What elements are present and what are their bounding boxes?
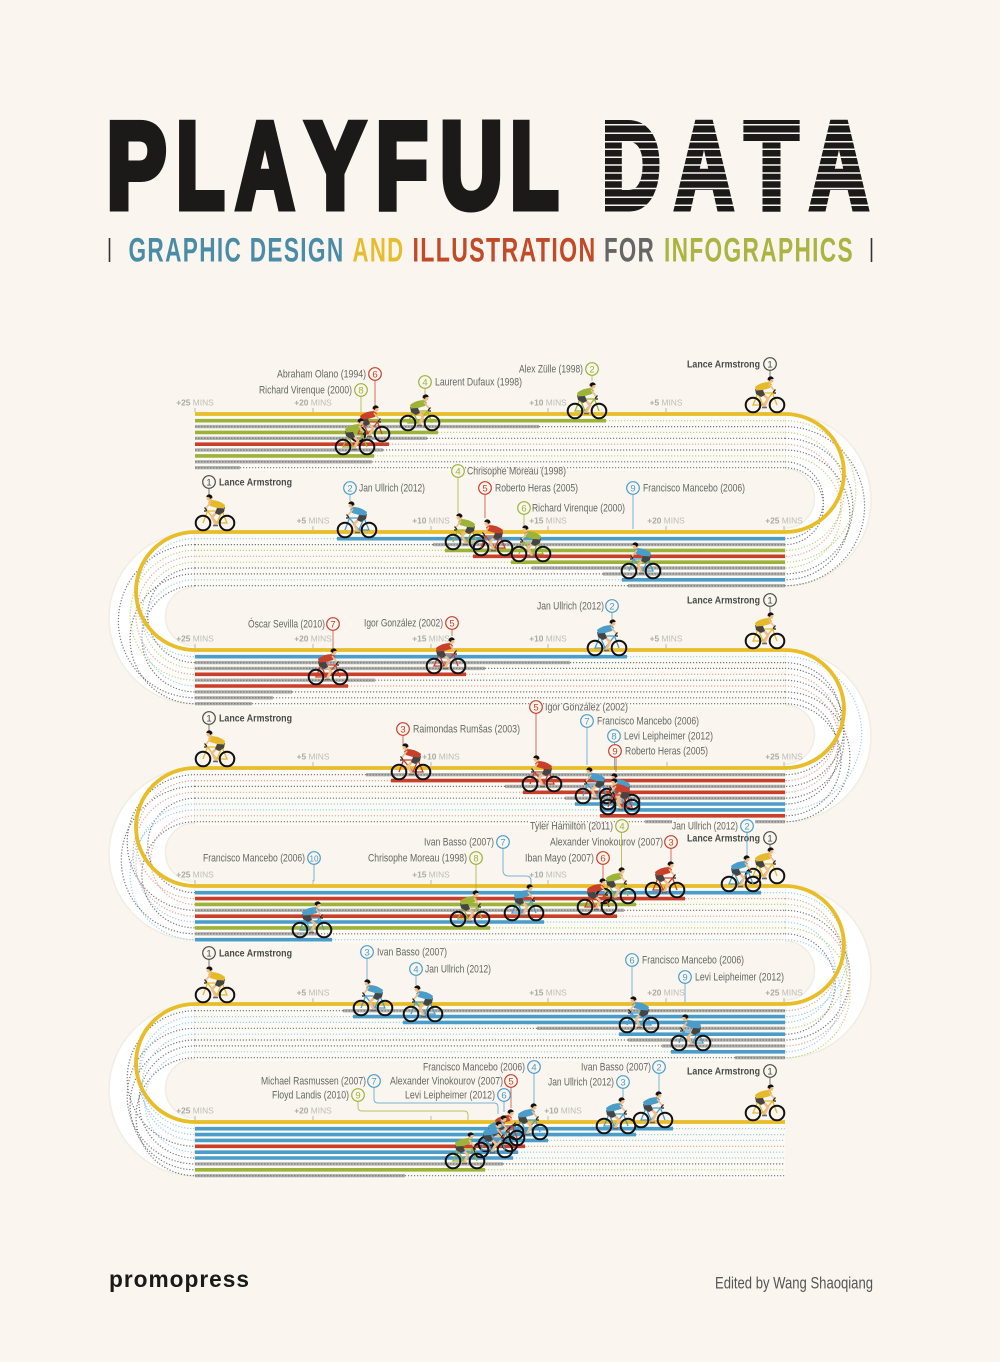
stage 2 riders	[196, 465, 745, 578]
rider: Jan Ullrich	[338, 482, 425, 537]
time axis labels: stage 1: +25 MINS	[176, 398, 214, 408]
rider: Michael Rasmussen	[261, 1075, 517, 1151]
time axis labels: stage 7: +10 MINS	[544, 1106, 582, 1116]
icon: cyclist Sevilla	[309, 648, 347, 684]
icon: cyclist Vinokourov	[486, 1109, 524, 1145]
rider: Richard Virenque	[259, 384, 374, 454]
rider: Ivan Basso: 2	[656, 1062, 662, 1073]
time axis labels: stage 6: +5 MINS	[297, 988, 330, 998]
rider: Raimondas Rumšas: 3	[400, 724, 406, 735]
rider: Lance Armstrong: Lance Armstrong	[219, 478, 292, 489]
rider: Abraham Olano	[277, 368, 389, 441]
time axis labels: stage 1: +5 MINS	[650, 398, 683, 408]
rider: Levi Leipheimer: 6	[501, 1090, 507, 1101]
icon: cyclist Leipheimer	[474, 1121, 512, 1157]
rider: Jan Ullrich: Jan Ullrich (2012)	[425, 964, 491, 976]
icon: cyclist Basso	[634, 1091, 672, 1127]
rider: Lance Armstrong: 1	[767, 595, 773, 606]
rider: Lance Armstrong: Lance Armstrong	[219, 714, 292, 725]
time axis labels: stage 4: +25 MINS	[765, 752, 803, 762]
time axis labels: stage 5: +25 MINS	[176, 870, 214, 880]
icon: cyclist Rumšas	[392, 743, 430, 779]
rider: Jan Ullrich: Jan Ullrich (2012)	[359, 483, 425, 495]
rider: Igor González	[523, 701, 628, 791]
rider: Chrisophe Moreau: Chrisophe Moreau (1998)	[368, 853, 467, 865]
rider: Alexander Vinokourov	[550, 836, 684, 897]
rider: Lance Armstrong: 1	[767, 359, 773, 370]
time axis labels: stage 7: +20 MINS	[294, 1106, 332, 1116]
subtitle: FOR	[604, 232, 655, 270]
rider: Levi Leipheimer	[672, 971, 784, 1050]
subtitle: AND	[352, 232, 404, 270]
icon: cyclist Mancebo	[620, 996, 658, 1032]
icon: cyclist Rasmussen	[479, 1115, 517, 1151]
rider: Abraham Olano: Abraham Olano (1994)	[277, 369, 366, 381]
time axis labels: stage 4	[297, 752, 803, 766]
time axis labels: stage 5: +15 MINS	[412, 870, 450, 880]
rider: Roberto Heras: 5	[482, 483, 488, 494]
rider: Iban Mayo: Iban Mayo (2007)	[525, 853, 594, 865]
stage 5 riders	[203, 820, 784, 937]
icon: cyclist Heras	[601, 778, 639, 814]
rider: Levi Leipheimer: Levi Leipheimer (2012)	[695, 972, 784, 984]
rider: Jan Ullrich	[404, 963, 491, 1021]
time axis labels: stage 4: +5 MINS	[297, 752, 330, 762]
rider: Ivan Basso	[424, 836, 543, 920]
rider: Ivan Basso: 7	[500, 837, 506, 848]
time gap bars: stage 2	[118, 539, 785, 704]
rider: Abraham Olano: 6	[372, 369, 378, 380]
rider: Ivan Basso	[354, 946, 447, 1015]
rider: Francisco Mancebo	[576, 715, 699, 803]
rider: Ivan Basso: Ivan Basso (2007)	[424, 837, 494, 849]
rider: Levi Leipheimer: Levi Leipheimer (2012)	[624, 731, 713, 743]
rider: Richard Virenque: Richard Virenque (2000)	[259, 385, 352, 397]
icon: cyclist González	[523, 755, 561, 791]
icon: cyclist Ullrich	[588, 619, 626, 655]
time axis labels: stage 1: +10 MINS	[529, 398, 567, 408]
title: DATA striped: A	[675, 98, 733, 234]
time axis labels: stage 5	[176, 870, 567, 884]
icon: cyclist Ullrich	[404, 985, 442, 1021]
rider: Jan Ullrich: 2	[347, 483, 353, 494]
time axis labels: stage 6: +20 MINS	[647, 988, 685, 998]
rider: Jan Ullrich: Jan Ullrich (2012)	[548, 1077, 614, 1089]
icon: cyclist Dufaux	[401, 394, 439, 430]
stage 3 riders	[248, 594, 784, 684]
rider: Lance Armstrong: Lance Armstrong	[687, 834, 760, 845]
rider: Igor González	[364, 617, 465, 673]
rider: Francisco Mancebo: Francisco Mancebo (2006)	[642, 955, 744, 967]
track background: white curved bands	[109, 414, 871, 1179]
time axis labels: stage 6	[297, 988, 803, 1002]
rider: Richard Virenque: 6	[521, 503, 527, 514]
rider: Francisco Mancebo	[620, 954, 744, 1032]
icon: cyclist Armstrong	[746, 847, 784, 883]
stage 4 riders	[196, 701, 713, 814]
icon: cyclist Hamilton	[597, 867, 635, 903]
rider: Igor González: 5	[449, 618, 455, 629]
rider: Lance Armstrong: Lance Armstrong	[219, 949, 292, 960]
rider: Ivan Basso: Ivan Basso (2007)	[581, 1062, 651, 1074]
icon: cyclist Armstrong	[196, 730, 234, 766]
rider: Francisco Mancebo: Francisco Mancebo (2006)	[597, 716, 699, 728]
icon: cyclist Zülle	[568, 382, 606, 418]
rider: Tyler Hamilton	[530, 820, 635, 903]
rider: Francisco Mancebo: Francisco Mancebo (2006)	[643, 483, 745, 495]
icon: cyclist Armstrong	[196, 966, 234, 1002]
rider: Roberto Heras: Roberto Heras (2005)	[495, 483, 578, 495]
rider: Richard Virenque: Richard Virenque (2000)	[532, 503, 625, 515]
publisher: promopress: promopress	[109, 1266, 250, 1292]
rider: Michael Rasmussen: Michael Rasmussen (2007)	[261, 1076, 366, 1088]
yellow race track line	[136, 414, 844, 1122]
icon: cyclist Mancebo	[509, 1103, 547, 1139]
icon: cyclist Basso	[354, 979, 392, 1015]
rider: Levi Leipheimer: Levi Leipheimer (2012)	[405, 1090, 495, 1102]
title: PLAYFUL: F	[376, 98, 428, 234]
rider: Alexander Vinokourov: Alexander Vinokourov (2007)	[550, 837, 663, 849]
title: PLAYFUL: Y	[306, 98, 364, 234]
time axis labels: stage 6: +15 MINS	[529, 988, 567, 998]
icon: cyclist Heras	[474, 519, 512, 555]
rider: Óscar Sevilla: Óscar Sevilla (2010)	[248, 618, 325, 631]
icon: cyclist Basso	[505, 884, 543, 920]
time gap bars: stage 7	[195, 1129, 785, 1176]
rider: Lance Armstrong: 1	[206, 477, 212, 488]
rider: Jan Ullrich	[672, 820, 760, 891]
time axis labels: stage 2: +20 MINS	[647, 516, 685, 526]
time axis labels: stage 2: +15 MINS	[529, 516, 567, 526]
icon: cyclist González	[427, 637, 465, 673]
icon: cyclist Armstrong	[746, 376, 784, 412]
time axis labels: stage 1	[176, 398, 683, 412]
rider: Jan Ullrich: Jan Ullrich (2012)	[672, 821, 738, 833]
rider: Lance Armstrong	[687, 1065, 784, 1120]
stage 7 riders	[261, 1061, 784, 1168]
rider: Jan Ullrich	[537, 600, 626, 655]
rider: Jan Ullrich	[548, 1076, 635, 1133]
rider: Floyd Landis	[272, 1089, 484, 1168]
rider: Francisco Mancebo: 10	[310, 854, 319, 863]
title: PLAYFUL: L	[176, 98, 224, 234]
title: PLAYFUL: L	[510, 98, 558, 234]
rider: Alex Zülle: 2	[589, 364, 595, 375]
icon: cyclist Ullrich	[722, 855, 760, 891]
rider: Lance Armstrong: 1	[767, 833, 773, 844]
icon: cyclist Leipheimer	[601, 773, 639, 809]
time gap bars: stage 3	[195, 657, 862, 822]
rider: Raimondas Rumšas	[392, 723, 520, 779]
rider: Tyler Hamilton: 4	[619, 821, 625, 832]
rider: Ivan Basso: Ivan Basso (2007)	[377, 947, 447, 959]
title: PLAYFUL: A	[236, 98, 294, 234]
time axis labels: stage 7: +25 MINS	[176, 1106, 214, 1116]
rider: Roberto Heras	[601, 745, 708, 814]
rider: Richard Virenque: 8	[358, 385, 364, 396]
time axis labels: stage 3: +25 MINS	[176, 634, 214, 644]
icon: cyclist Mayo	[578, 878, 616, 914]
rider: Francisco Mancebo	[423, 1061, 547, 1139]
icon: cyclist Moreau	[446, 513, 484, 549]
icon: cyclist Landis	[446, 1132, 484, 1168]
icon: cyclist Mancebo	[622, 542, 660, 578]
rider: Francisco Mancebo: 4	[531, 1062, 537, 1073]
time gap bars: stage 4	[121, 775, 785, 940]
rider: Levi Leipheimer: 9	[682, 972, 688, 983]
rider: Lance Armstrong: 1	[767, 1066, 773, 1077]
rider: Chrisophe Moreau: 4	[455, 466, 461, 477]
rider: Alex Zülle: Alex Zülle (1998)	[519, 364, 583, 376]
time axis labels: stage 7	[176, 1106, 582, 1120]
title: DATA striped: D	[602, 98, 660, 234]
rider: Roberto Heras: Roberto Heras (2005)	[625, 746, 708, 758]
rider: Igor González: 5	[533, 702, 539, 713]
time axis labels: stage 3	[176, 634, 683, 648]
rider: Francisco Mancebo: 9	[630, 483, 636, 494]
rider: Francisco Mancebo: 6	[629, 955, 635, 966]
time axis labels: stage 3: +15 MINS	[412, 634, 450, 644]
rider: Óscar Sevilla	[248, 618, 347, 684]
icon: cyclist Moreau	[451, 890, 489, 926]
title: PLAYFUL: P	[107, 98, 166, 234]
time axis labels: stage 1: +20 MINS	[294, 398, 332, 408]
rider: Richard Virenque	[512, 502, 625, 561]
icon: cyclist Virenque	[512, 525, 550, 561]
icon: cyclist Ullrich	[338, 501, 376, 537]
icon: cyclist Mancebo	[293, 901, 331, 937]
time axis labels: stage 2	[297, 516, 803, 530]
time gap bars: stage 1	[195, 421, 865, 586]
rider: Jan Ullrich: Jan Ullrich (2012)	[537, 601, 604, 613]
stage 6 riders	[196, 946, 784, 1050]
rider: Alexander Vinokourov: 3	[668, 837, 674, 848]
rider: Alex Zülle	[519, 363, 606, 418]
rider: Levi Leipheimer: 8	[611, 731, 617, 742]
rider: Alexander Vinokourov: 5	[508, 1076, 514, 1087]
icon: cyclist Virenque	[336, 418, 374, 454]
title: PLAYFUL	[107, 98, 558, 234]
rider: Francisco Mancebo: 7	[584, 716, 590, 727]
time axis labels: stage 3: +10 MINS	[529, 634, 567, 644]
stage 1 riders	[259, 358, 784, 454]
title: DATA striped	[598, 98, 878, 234]
rider: Floyd Landis: 9	[355, 1090, 361, 1101]
rider: Ivan Basso	[581, 1061, 672, 1127]
time axis labels: stage 3: +20 MINS	[294, 634, 332, 644]
time axis labels: stage 6: +25 MINS	[765, 988, 803, 998]
time gap bars: stage 6	[127, 1011, 785, 1176]
rider: Michael Rasmussen: 7	[371, 1076, 377, 1087]
rider: Francisco Mancebo	[622, 482, 745, 578]
rider: Jan Ullrich: 3	[620, 1077, 626, 1088]
title: DATA striped: T	[745, 98, 798, 234]
rider: Lance Armstrong	[196, 476, 292, 530]
rider: Chrisophe Moreau: Chrisophe Moreau (1998)	[467, 466, 566, 478]
time gap bars: stage 5	[195, 893, 850, 1058]
rider: Chrisophe Moreau: 8	[473, 853, 479, 864]
icon: cyclist Leipheimer	[672, 1014, 710, 1050]
rider: Levi Leipheimer	[405, 1089, 512, 1157]
rider: Laurent Dufaux: Laurent Dufaux (1998)	[435, 377, 522, 389]
editor credit: Edited by Wang Shaoqiang	[715, 1274, 873, 1292]
rider: Lance Armstrong: Lance Armstrong	[687, 596, 760, 607]
rider: Roberto Heras	[474, 482, 578, 555]
rider: Igor González: Igor González (2002)	[364, 618, 443, 630]
title: DATA striped: A	[810, 98, 868, 234]
time axis labels: stage 2: +25 MINS	[765, 516, 803, 526]
rider: Iban Mayo: 6	[600, 853, 606, 864]
subtitle: ILLUSTRATION	[412, 232, 596, 270]
rider: Jan Ullrich: 2	[744, 821, 750, 832]
time axis labels: stage 3: +5 MINS	[650, 634, 683, 644]
rider: Floyd Landis: Floyd Landis (2010)	[272, 1090, 349, 1102]
subtitle: INFOGRAPHICS	[664, 232, 854, 270]
rider: Tyler Hamilton: Tyler Hamilton (2011)	[530, 821, 613, 833]
icon: cyclist Mancebo	[576, 767, 614, 803]
rider: Lance Armstrong	[196, 712, 292, 766]
rider: Jan Ullrich: 2	[609, 601, 615, 612]
time axis labels: stage 2: +10 MINS	[412, 516, 450, 526]
subtitle	[110, 232, 872, 270]
rider: Lance Armstrong: Lance Armstrong	[687, 360, 760, 371]
rider: Chrisophe Moreau	[368, 852, 489, 926]
rider: Alexander Vinokourov: Alexander Vinokourov (2007)	[390, 1076, 503, 1088]
rider: Roberto Heras: 9	[612, 746, 618, 757]
rider: Lance Armstrong: 1	[206, 948, 212, 959]
rider: Levi Leipheimer	[601, 730, 713, 809]
rider: Igor González: Igor González (2002)	[545, 702, 628, 714]
rider: Laurent Dufaux: 4	[422, 377, 428, 388]
rider: Lance Armstrong	[687, 358, 784, 412]
rider: Alexander Vinokourov	[390, 1075, 524, 1145]
rider: Laurent Dufaux	[401, 376, 522, 430]
rider: Lance Armstrong: 1	[206, 713, 212, 724]
rider: Raimondas Rumšas: Raimondas Rumšas (2003)	[413, 724, 520, 736]
time axis labels: stage 4: +10 MINS	[422, 752, 460, 762]
time axis labels: stage 5: +10 MINS	[529, 870, 567, 880]
rider: Óscar Sevilla: 7	[330, 619, 336, 630]
rider: Lance Armstrong: Lance Armstrong	[687, 1067, 760, 1078]
title: PLAYFUL: U	[440, 98, 503, 234]
rider: Francisco Mancebo	[203, 852, 331, 937]
rider: Francisco Mancebo: Francisco Mancebo (2006)	[203, 853, 305, 865]
icon: cyclist Armstrong	[746, 1084, 784, 1120]
rider: Francisco Mancebo: Francisco Mancebo (2006)	[423, 1062, 525, 1074]
icon: cyclist Vinokourov	[646, 861, 684, 897]
icon: cyclist Armstrong	[196, 494, 234, 530]
subtitle: GRAPHIC DESIGN	[128, 232, 344, 270]
rider: Lance Armstrong	[687, 594, 784, 648]
rider: Jan Ullrich: 4	[413, 964, 419, 975]
rider: Ivan Basso: 3	[364, 947, 370, 958]
icon: cyclist Armstrong	[746, 612, 784, 648]
time axis labels: stage 2: +5 MINS	[297, 516, 330, 526]
rider: Lance Armstrong	[687, 832, 784, 883]
rider: Lance Armstrong	[196, 947, 292, 1002]
icon: cyclist Ullrich	[597, 1097, 635, 1133]
icon: cyclist Olano	[351, 405, 389, 441]
rider: Iban Mayo	[525, 852, 616, 914]
rider: Chrisophe Moreau	[446, 465, 566, 549]
